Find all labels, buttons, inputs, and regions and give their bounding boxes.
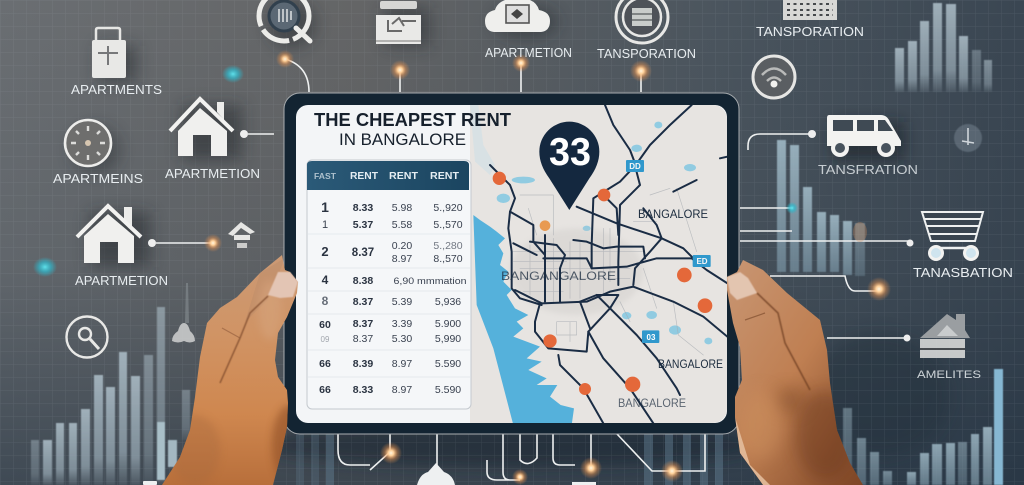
tablet	[284, 93, 739, 434]
row 4	[322, 294, 461, 308]
row 7: 8.33	[353, 384, 373, 396]
row 1: 5.58	[392, 219, 412, 231]
row 7: 66	[319, 384, 331, 396]
row 1: 1	[322, 219, 328, 231]
marker labels: DD	[629, 162, 641, 171]
icon: wifi dial	[753, 56, 795, 98]
row 1: 5.98	[392, 202, 412, 214]
bar chart: bottom right	[843, 369, 1003, 485]
row 7: 5.590	[435, 384, 461, 396]
label: apartmetion top: APARTMETION	[485, 46, 572, 60]
row 1: 5.,570	[433, 219, 463, 231]
icon: house upper	[170, 99, 242, 160]
row 6	[319, 358, 461, 370]
finger fold	[220, 296, 268, 383]
row 4: 5,936	[435, 296, 461, 308]
row 4: 8.37	[353, 296, 373, 308]
row 5: 8.37	[353, 333, 373, 345]
label: apartments: APARTMENTS	[71, 83, 162, 97]
label: apartmetion lower: APARTMETION	[75, 274, 168, 288]
bottom white fragments	[143, 463, 596, 485]
title	[314, 110, 511, 149]
row 6: 66	[319, 358, 331, 370]
bar chart: bottom centre backdrop	[296, 434, 723, 485]
map labels: BANGALORE	[618, 398, 686, 410]
icon: grey house	[920, 314, 970, 358]
marker labels: 03	[647, 333, 656, 342]
finger fold	[757, 293, 810, 390]
connector: van	[748, 130, 816, 150]
row 1	[321, 199, 463, 231]
icon: suitcase	[92, 28, 136, 82]
map labels: BANGALORE	[658, 359, 723, 371]
label: tansporation top: TANSPORATION	[597, 47, 696, 61]
row 5: 3.39	[392, 318, 412, 330]
rent table: FAST	[314, 172, 336, 181]
connectors: right side	[740, 202, 914, 342]
map labels: BANGALORE	[638, 209, 708, 221]
right hand	[726, 260, 863, 485]
table header	[307, 161, 469, 190]
bar chart: top right	[895, 3, 992, 92]
thumbnail	[727, 272, 757, 300]
row 2: 8.,570	[433, 253, 463, 265]
marker labels: ED	[696, 257, 708, 266]
map labels: BANGANGALORE	[501, 271, 616, 283]
connectors: top	[276, 50, 652, 92]
pin number: 33	[549, 131, 591, 174]
marker labels	[629, 162, 708, 342]
left hand	[162, 255, 298, 485]
row 1: 5.,920	[433, 202, 463, 214]
icon: shopping cart	[922, 212, 983, 260]
bar chart: middle right	[777, 140, 865, 276]
icon: building grid	[783, 0, 837, 20]
icon: dim star glow	[954, 124, 982, 152]
row 6: 5.590	[435, 358, 461, 370]
row 6: 8.39	[353, 358, 373, 370]
label: tansporation right: TANSPORATION	[756, 25, 864, 39]
icon: small house	[228, 222, 255, 248]
thumbnail	[268, 272, 298, 298]
row 7: 8.97	[392, 384, 412, 396]
row 1: 8.33	[353, 202, 373, 214]
row 2: 5.,280	[433, 240, 463, 252]
label: apartmeins: APARTMEINS	[53, 172, 143, 186]
bar chart: bottom left	[31, 307, 190, 485]
icon: search target	[259, 0, 316, 48]
row 3: 8.38	[353, 275, 373, 287]
row 2: 2	[321, 244, 329, 259]
connector: lower house	[148, 234, 222, 252]
row 5: 5.900	[435, 318, 461, 330]
icon: house lower	[77, 206, 150, 267]
row 5: 5.30	[392, 333, 412, 345]
row 2: 8.97	[392, 253, 412, 265]
row 5: 09	[321, 335, 330, 344]
row 2: 8.37	[352, 247, 374, 259]
table card	[307, 160, 471, 409]
cyan glow markers	[33, 65, 244, 277]
row 1: 5.37	[353, 219, 373, 231]
icon: document box	[376, 1, 430, 46]
connectors: bottom	[338, 434, 705, 485]
rent table	[307, 160, 471, 409]
row 2: 0.20	[392, 240, 412, 252]
tablet screen	[296, 105, 727, 423]
icon: cloud	[485, 0, 558, 38]
icon: clock dial	[65, 120, 120, 174]
tablet body	[284, 93, 739, 434]
row 1: 1	[321, 199, 329, 215]
label: tanasbation: TANASBATION	[913, 266, 1013, 280]
row 6: 8.97	[392, 358, 412, 370]
label: apartmetion upper: APARTMETION	[165, 167, 260, 181]
icon: van	[827, 115, 904, 160]
label: amelites: AMELITES	[917, 369, 981, 381]
location pin	[539, 122, 599, 210]
table row bands	[308, 233, 470, 378]
row 5	[319, 318, 461, 345]
icon: magnifier	[66, 316, 108, 358]
row 4: 8	[322, 294, 329, 308]
rent table: RENT	[430, 171, 459, 182]
map	[470, 105, 727, 425]
label: tansfration: TANSFRATION	[818, 163, 918, 177]
map labels	[501, 209, 723, 410]
title: THE CHEAPEST RENT	[314, 110, 511, 130]
rent table: RENT	[350, 171, 378, 182]
row 7	[319, 384, 461, 396]
row 2	[321, 240, 463, 265]
icon: target list	[616, 0, 668, 43]
row 5: 60	[319, 319, 331, 331]
row 5: 5,990	[435, 333, 461, 345]
row 3: 6,90 mmmation	[394, 276, 466, 286]
title: IN BANGALORE	[339, 130, 466, 149]
map roads and water	[470, 105, 727, 425]
map markers	[493, 172, 712, 395]
row 3	[322, 273, 466, 287]
row 4: 5.39	[392, 296, 412, 308]
rent table: RENT	[389, 171, 418, 182]
row 5: 8.37	[353, 318, 373, 330]
icon: grey cloud	[172, 283, 195, 342]
row 3: 4	[322, 273, 329, 287]
connector: upper house	[240, 130, 274, 138]
